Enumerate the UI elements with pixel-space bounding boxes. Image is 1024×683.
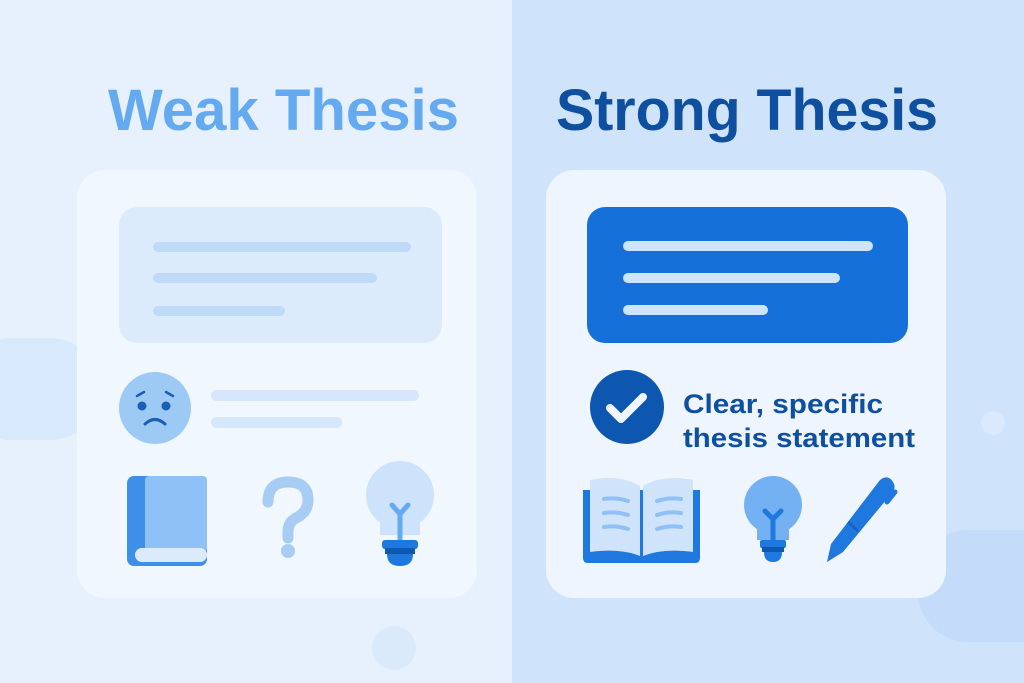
icon: light bulb bright — [744, 476, 802, 562]
icon: light bulb dim — [366, 461, 434, 566]
title: Strong Thesis: Strong Thesis — [556, 78, 938, 143]
callout text: Clear, specific — [683, 389, 883, 419]
strong text box — [587, 207, 908, 343]
icon: pen — [827, 477, 895, 562]
icon: question mark — [268, 482, 308, 558]
panel: weak thesis card — [77, 170, 477, 598]
title: Weak Thesis: Weak Thesis — [108, 78, 459, 143]
callout text: thesis statement — [683, 423, 915, 453]
weak description lines — [211, 390, 419, 428]
panel: strong thesis card — [546, 170, 946, 598]
icon: check circle — [590, 370, 664, 444]
weak text box — [119, 207, 442, 343]
icon: sad face — [119, 372, 191, 444]
callout text — [683, 389, 915, 453]
icon: open book — [583, 478, 700, 563]
icon: closed book — [127, 476, 207, 566]
